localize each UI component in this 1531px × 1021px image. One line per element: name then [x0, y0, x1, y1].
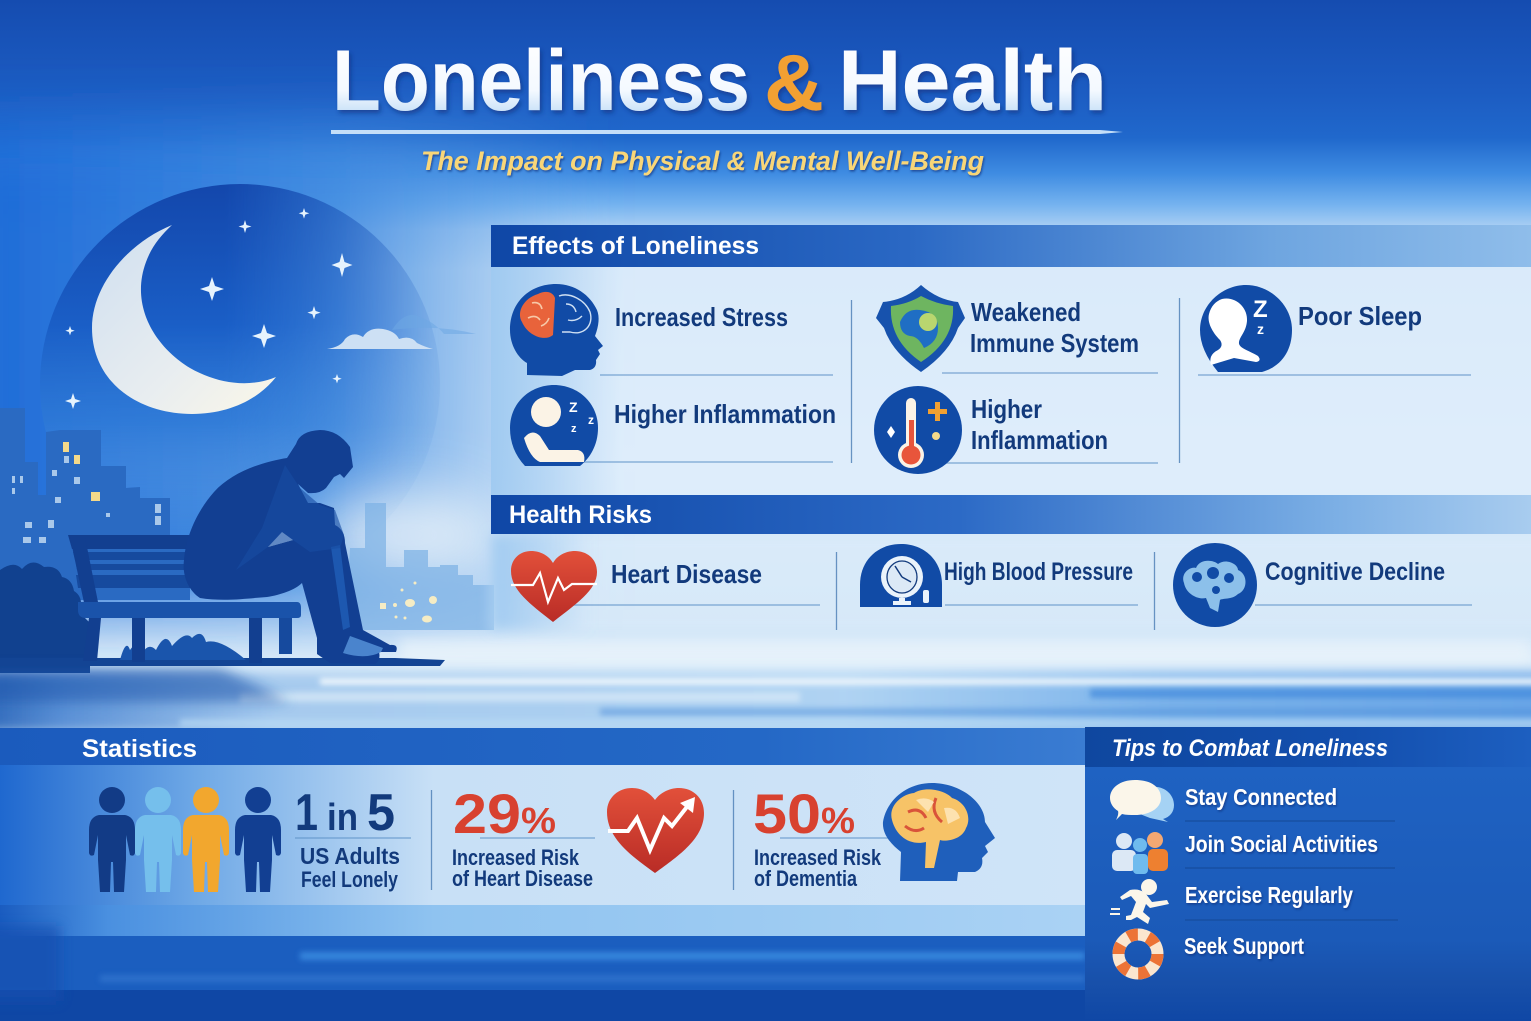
stat: 29 percent	[452, 782, 704, 891]
icon: resting person: z	[588, 413, 594, 427]
title	[332, 33, 1107, 129]
heading: effects	[491, 225, 1531, 267]
title word: Loneliness: Loneliness	[332, 33, 750, 129]
icon: resting person: z	[571, 423, 577, 435]
item: higher inflammation left: Higher Inflammation	[614, 399, 836, 429]
night sky circle	[40, 184, 440, 498]
icon: resting person	[510, 385, 598, 466]
icon: heart with pulse	[511, 551, 597, 622]
panel: tips to combat loneliness	[1085, 727, 1531, 1021]
item: higher inflammation left	[510, 385, 836, 466]
park bench	[68, 535, 301, 663]
title ampersand: &	[764, 38, 824, 127]
tip: join social activities: Join Social Activities	[1185, 831, 1378, 857]
tip: stay connected: Stay Connected	[1185, 784, 1337, 810]
illustration: lonely person under the moon	[0, 184, 494, 702]
icon: shield	[876, 285, 965, 372]
stat: 50 percent: of Dementia	[754, 866, 858, 891]
tip: stay connected	[1110, 780, 1337, 822]
item: poor sleep: Poor Sleep	[1298, 301, 1422, 331]
item: cognitive decline: Cognitive Decline	[1265, 558, 1445, 586]
item: heart disease	[511, 551, 762, 622]
heading: health risks: Health Risks	[509, 501, 652, 529]
tip: join social activities	[1112, 831, 1378, 874]
icon: thermometer	[874, 386, 962, 474]
heading: tips	[1085, 727, 1531, 767]
item: weakened immune system: Weakened	[971, 297, 1081, 327]
icon: group of people	[1112, 832, 1168, 874]
icon: gauge	[860, 544, 942, 607]
stat: 1 in 5: 1	[295, 784, 318, 842]
person silhouette	[184, 430, 397, 664]
item: high blood pressure: High Blood Pressure	[944, 558, 1133, 586]
heading: health risks	[491, 495, 1531, 534]
panel: effects of loneliness	[491, 225, 1531, 495]
item: increased stress	[510, 284, 788, 376]
icon: sleeping head	[1200, 285, 1292, 372]
icon: brain circle	[1173, 543, 1257, 627]
title word: Health: Health	[838, 33, 1107, 129]
subtitle: The Impact on Physical & Mental Well-Being	[421, 146, 984, 176]
icon: speech bubbles	[1110, 780, 1174, 822]
item: higher inflammation right: Higher	[971, 394, 1042, 424]
stat: 50 percent: 50	[753, 782, 821, 845]
icon: head with brain	[510, 284, 603, 376]
icon: heart with arrow	[607, 788, 704, 873]
stars	[65, 208, 352, 409]
stat: 50 percent	[753, 782, 995, 891]
stat: 1 in 5: 5	[367, 784, 395, 842]
heading: statistics	[0, 728, 1085, 765]
stat: 50 percent: Increased Risk	[754, 845, 882, 870]
panel: health risks	[491, 495, 1531, 634]
item: high blood pressure	[860, 544, 1133, 607]
tip: exercise regularly	[1110, 879, 1353, 924]
icon: sleeping head: Z	[1253, 296, 1268, 323]
foliage	[0, 562, 290, 702]
tip: seek support	[1118, 933, 1304, 974]
ground	[0, 634, 445, 666]
tip: seek support: Seek Support	[1184, 933, 1304, 959]
heading: statistics: Statistics	[82, 735, 197, 763]
item: weakened immune system: Immune System	[970, 328, 1139, 358]
item: weakened immune system	[876, 285, 1139, 372]
icon: sleeping head: z	[1257, 321, 1264, 337]
stat: 1 in 5: Feel Lonely	[301, 867, 399, 892]
stat: 1 in 5: in	[327, 797, 358, 839]
city lights	[380, 582, 437, 622]
panel: statistics	[0, 728, 1085, 905]
city skyline left	[0, 408, 190, 600]
item: increased stress: Increased Stress	[615, 302, 788, 332]
icon: four people	[89, 787, 281, 892]
stat: 1 in 5	[89, 784, 411, 892]
item: poor sleep	[1200, 285, 1422, 372]
heading: effects: Effects of Loneliness	[512, 232, 759, 260]
icon: runner	[1110, 879, 1169, 924]
icon: head with brain	[883, 783, 995, 881]
icon: lifebuoy	[1118, 934, 1158, 974]
item: heart disease: Heart Disease	[611, 559, 762, 589]
stat: 29 percent: of Heart Disease	[452, 866, 593, 891]
stat: 29 percent: 29	[453, 782, 521, 845]
item: cognitive decline	[1173, 543, 1445, 627]
stat: 1 in 5: US Adults	[300, 843, 400, 869]
stat: 50 percent: %	[821, 800, 855, 841]
stat: 29 percent: Increased Risk	[452, 845, 580, 870]
city skyline right	[345, 503, 494, 630]
stat: 29 percent: %	[521, 800, 556, 841]
item: higher inflammation right: Inflammation	[971, 425, 1108, 455]
heading: tips: Tips to Combat Loneliness	[1112, 735, 1388, 762]
item: higher inflammation right	[874, 386, 1108, 474]
icon: resting person: Z	[569, 399, 578, 415]
icon: crescent moon	[92, 225, 276, 414]
tip: exercise regularly: Exercise Regularly	[1185, 882, 1353, 908]
cloud	[327, 315, 476, 349]
